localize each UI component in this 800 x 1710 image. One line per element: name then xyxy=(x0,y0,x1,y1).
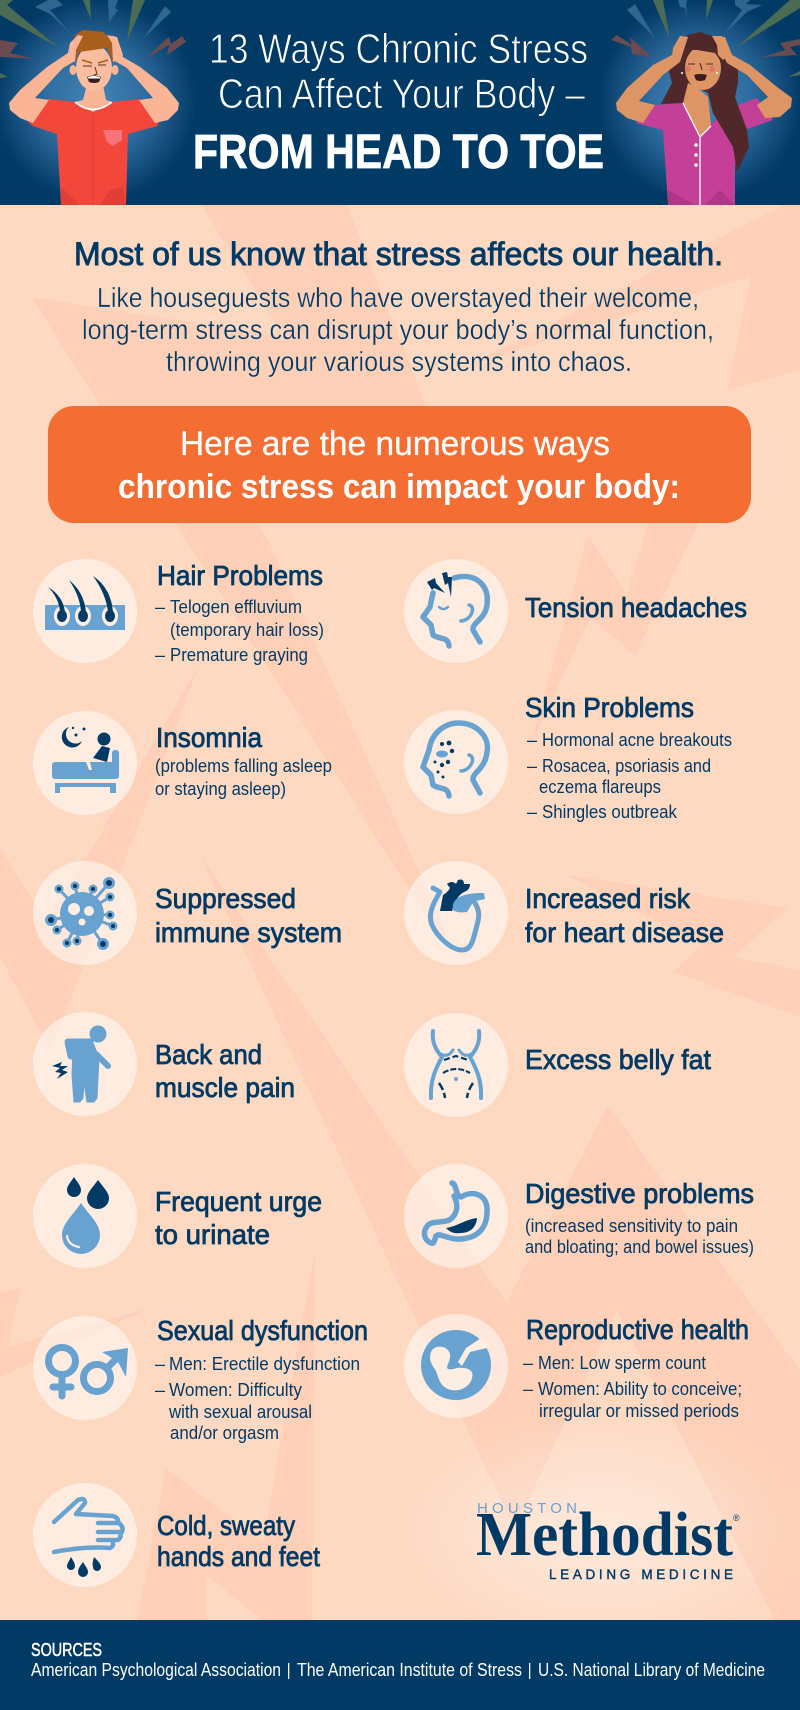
logo: Houston Methodist: Methodist xyxy=(476,1501,733,1569)
item: heart disease xyxy=(404,861,724,965)
item: frequent urge to urinate: Frequent urge xyxy=(155,1186,322,1217)
icon: stress bolts right xyxy=(611,0,800,77)
item: hair problems: Telogen effluvium xyxy=(170,597,302,617)
item: cold sweaty hands and feet: hands and feet xyxy=(157,1541,320,1572)
icon: embryo xyxy=(404,1314,508,1418)
icon: person with back pain xyxy=(33,1012,137,1116)
item: skin problems: Hormonal acne breakouts xyxy=(542,730,732,750)
item: insomnia: (problems falling asleep xyxy=(155,756,332,776)
item: sexual dysfunction: Women: Difficulty xyxy=(169,1380,302,1400)
item: sexual dysfunction: Men: Erectile dysfunction xyxy=(169,1354,360,1374)
item: reproductive health: Women: Ability to conceive; xyxy=(538,1379,742,1399)
item: hair problems: – xyxy=(155,645,165,665)
title: Can Affect Your Body – xyxy=(218,70,586,117)
item: insomnia: or staying asleep) xyxy=(155,779,286,799)
footer: sources: American Psychological Association xyxy=(31,1660,281,1680)
item: sexual dysfunction: with sexual arousal xyxy=(168,1402,312,1422)
icon: water droplets xyxy=(33,1164,137,1268)
item: suppressed immune system: immune system xyxy=(155,917,342,948)
icon: head with lightning xyxy=(404,559,508,663)
item: hair problems: Premature graying xyxy=(170,645,308,665)
item: skin problems: Rosacea, psoriasis and xyxy=(542,756,711,776)
title: FROM HEAD TO TOE xyxy=(193,126,604,179)
item: frequent urge to urinate xyxy=(33,1164,322,1268)
logo: Houston Methodist: ® xyxy=(733,1513,740,1523)
footer: sources: The American Institute of Stress xyxy=(297,1660,522,1680)
woman character xyxy=(616,32,792,205)
item: sexual dysfunction: – xyxy=(155,1380,165,1400)
logo: Houston Methodist: LEADING MEDICINE xyxy=(549,1567,733,1582)
item: insomnia: Insomnia xyxy=(156,722,262,753)
item: back and muscle pain xyxy=(33,1012,295,1116)
item: reproductive health: – xyxy=(523,1353,533,1373)
footer: sources xyxy=(0,1620,800,1710)
item: digestive problems: Digestive problems xyxy=(525,1178,754,1209)
item: skin problems: Skin Problems xyxy=(525,692,694,723)
footer: sources: SOURCES xyxy=(31,1640,102,1660)
icon: stomach xyxy=(404,1164,508,1268)
icon: sweating hand xyxy=(33,1483,137,1587)
item: frequent urge to urinate: to urinate xyxy=(155,1219,270,1250)
item: skin problems xyxy=(404,692,732,822)
item: sexual dysfunction: Sexual dysfunction xyxy=(157,1315,368,1346)
item: insomnia xyxy=(33,711,332,815)
item: reproductive health: – xyxy=(523,1379,533,1399)
item: cold sweaty hands and feet xyxy=(33,1483,320,1587)
item: digestive problems: (increased sensitivity to pain xyxy=(525,1216,738,1236)
intro text block xyxy=(74,236,723,377)
item: back and muscle pain: muscle pain xyxy=(155,1072,295,1103)
item: reproductive health: irregular or missed periods xyxy=(539,1401,739,1421)
icon: virus xyxy=(33,861,137,965)
item: reproductive health xyxy=(404,1314,749,1421)
icon: head with acne spots xyxy=(404,710,508,814)
item: digestive problems: and bloating; and bowel issues) xyxy=(525,1237,754,1257)
intro text block: Like houseguests who have overstayed their welcome, xyxy=(97,282,699,313)
intro text block: long-term stress can disrupt your body’s normal function, xyxy=(82,314,714,345)
item: skin problems: – xyxy=(527,730,537,750)
icon: gender symbols xyxy=(33,1316,137,1420)
item: tension headaches xyxy=(404,559,747,663)
item: hair problems: Hair Problems xyxy=(157,560,323,591)
item: hair problems xyxy=(33,559,324,665)
item: sexual dysfunction xyxy=(33,1315,368,1443)
item: heart disease: Increased risk xyxy=(525,883,691,914)
item: sexual dysfunction: and/or orgasm xyxy=(170,1423,279,1443)
orange callout banner: Here are the numerous ways xyxy=(180,425,610,463)
intro text block: Most of us know that stress affects our health. xyxy=(74,236,723,272)
item: skin problems: – xyxy=(527,756,537,776)
item: suppressed immune system: Suppressed xyxy=(155,883,296,914)
item: back and muscle pain: Back and xyxy=(155,1039,262,1070)
icon: person awake in bed xyxy=(33,711,137,815)
item: hair problems: – xyxy=(155,597,165,617)
item: suppressed immune system xyxy=(33,861,342,965)
item: cold sweaty hands and feet: Cold, sweaty xyxy=(157,1510,295,1541)
item: excess belly fat xyxy=(404,1013,711,1117)
footer: sources: U.S. National Library of Medicine xyxy=(538,1660,765,1680)
icon: heart xyxy=(404,861,508,965)
item: sexual dysfunction: – xyxy=(155,1354,165,1374)
item: skin problems: eczema flareups xyxy=(539,777,661,797)
orange callout banner xyxy=(48,406,751,523)
icon: stress bolts left xyxy=(0,0,186,78)
icon: hair follicles xyxy=(33,559,137,663)
orange callout banner: chronic stress can impact your body: xyxy=(118,468,680,506)
item: excess belly fat: Excess belly fat xyxy=(525,1044,711,1075)
item: skin problems: Shingles outbreak xyxy=(542,802,678,822)
intro text block: throwing your various systems into chaos. xyxy=(166,346,632,377)
item: reproductive health: Reproductive health xyxy=(526,1314,749,1345)
title: 13 Ways Chronic Stress xyxy=(209,25,588,72)
item: hair problems: (temporary hair loss) xyxy=(170,620,324,640)
item: skin problems: – xyxy=(527,802,537,822)
title xyxy=(193,25,604,179)
icon: torso xyxy=(404,1013,508,1117)
item: tension headaches: Tension headaches xyxy=(525,592,747,623)
header banner xyxy=(0,0,800,205)
item: digestive problems xyxy=(404,1164,754,1268)
logo: Houston Methodist: HOUSTON xyxy=(477,1500,577,1517)
man character xyxy=(9,30,179,205)
item: reproductive health: Men: Low sperm count xyxy=(538,1353,706,1373)
item: heart disease: for heart disease xyxy=(525,917,724,948)
